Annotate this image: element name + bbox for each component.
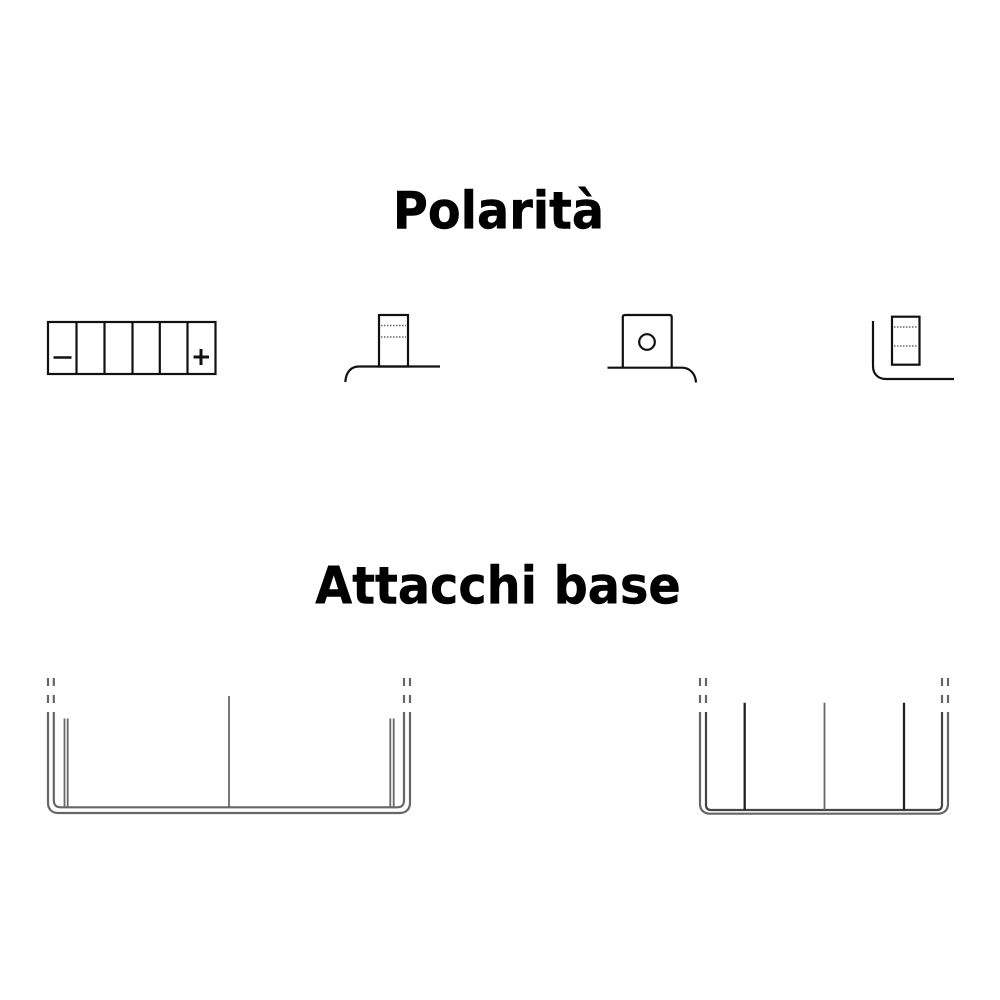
polarity icon: terminal inside corner bracket — [873, 317, 954, 379]
title: Attacchi base: Attacchi base — [315, 556, 681, 616]
base fixing diagram: wide tray with central divider — [48, 678, 410, 813]
polarity icon: terminal with round hole — [608, 315, 696, 382]
title: Polarità: Polarità — [393, 181, 604, 241]
base fixing diagram: narrow tray with three dividers — [700, 678, 948, 814]
polarity icon: terminal left side — [345, 315, 440, 382]
polarity icon: six-cell battery top view — [48, 322, 216, 374]
